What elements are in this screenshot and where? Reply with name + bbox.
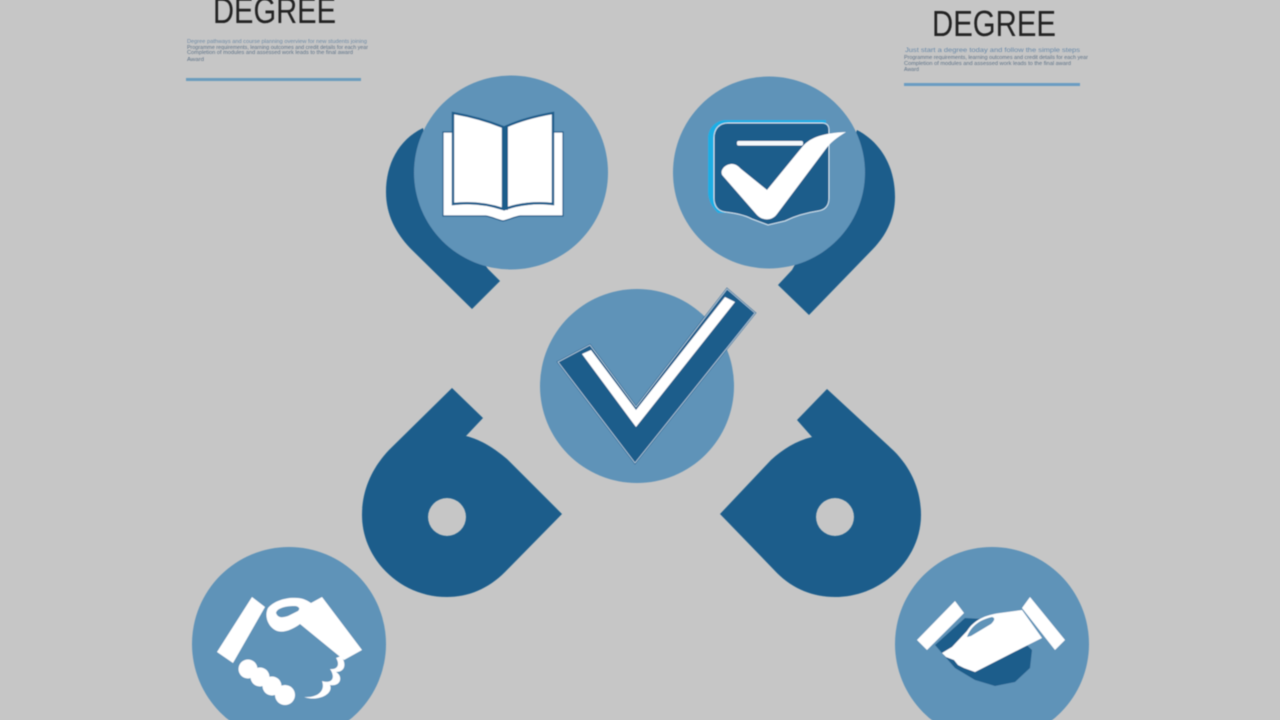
panel: bottom left handshake badge xyxy=(192,547,386,720)
icon: open book xyxy=(443,113,563,221)
caption: top right: Completion of modules and assessed work leads to the final award xyxy=(904,61,1071,67)
caption: top right: Just start a degree today and follow the simple steps xyxy=(905,48,1080,54)
panel: left pin xyxy=(362,388,562,597)
panel: checklist badge xyxy=(673,76,895,315)
caption: top right xyxy=(904,48,1088,73)
text block: top right xyxy=(904,3,1088,86)
caption: top right: Programme requirements, learning outcomes and credit details for each year xyxy=(904,55,1088,61)
text block: top left xyxy=(186,0,368,81)
dark tail: checklist badge xyxy=(778,130,895,315)
caption: top left xyxy=(187,39,368,63)
circle: book badge xyxy=(414,76,608,270)
caption: top left: Degree pathways and course planning overview for new students joining xyxy=(187,39,367,45)
caption: top right: Award xyxy=(904,67,919,73)
rule: top left xyxy=(186,78,361,81)
circle: centre badge xyxy=(540,289,734,483)
caption: top left: Completion of modules and assessed work leads to the final award xyxy=(187,50,353,56)
panel: bottom right handshake badge xyxy=(895,547,1089,720)
dark tail: book badge xyxy=(386,128,500,309)
icon: checked card xyxy=(708,120,846,225)
rule: top right xyxy=(904,83,1080,86)
icon: large check mark xyxy=(558,289,755,463)
icon: handshake outline xyxy=(217,597,362,705)
circle: bottom right badge xyxy=(895,547,1089,720)
circle: checklist badge xyxy=(673,76,865,268)
caption: top left: Programme requirements, learning outcomes and credit details for each year xyxy=(187,45,368,51)
heading: top right: DEGREE xyxy=(932,3,1056,44)
pin shape with hole: right xyxy=(720,389,921,597)
icon: clasped hands xyxy=(917,597,1065,686)
caption: top left: Award xyxy=(187,57,204,63)
circle: bottom left badge xyxy=(192,547,386,720)
pin shape with hole: left xyxy=(362,388,562,597)
panel: right pin xyxy=(720,389,921,597)
panel: centre check badge xyxy=(540,289,755,483)
panel: book badge xyxy=(386,76,608,309)
